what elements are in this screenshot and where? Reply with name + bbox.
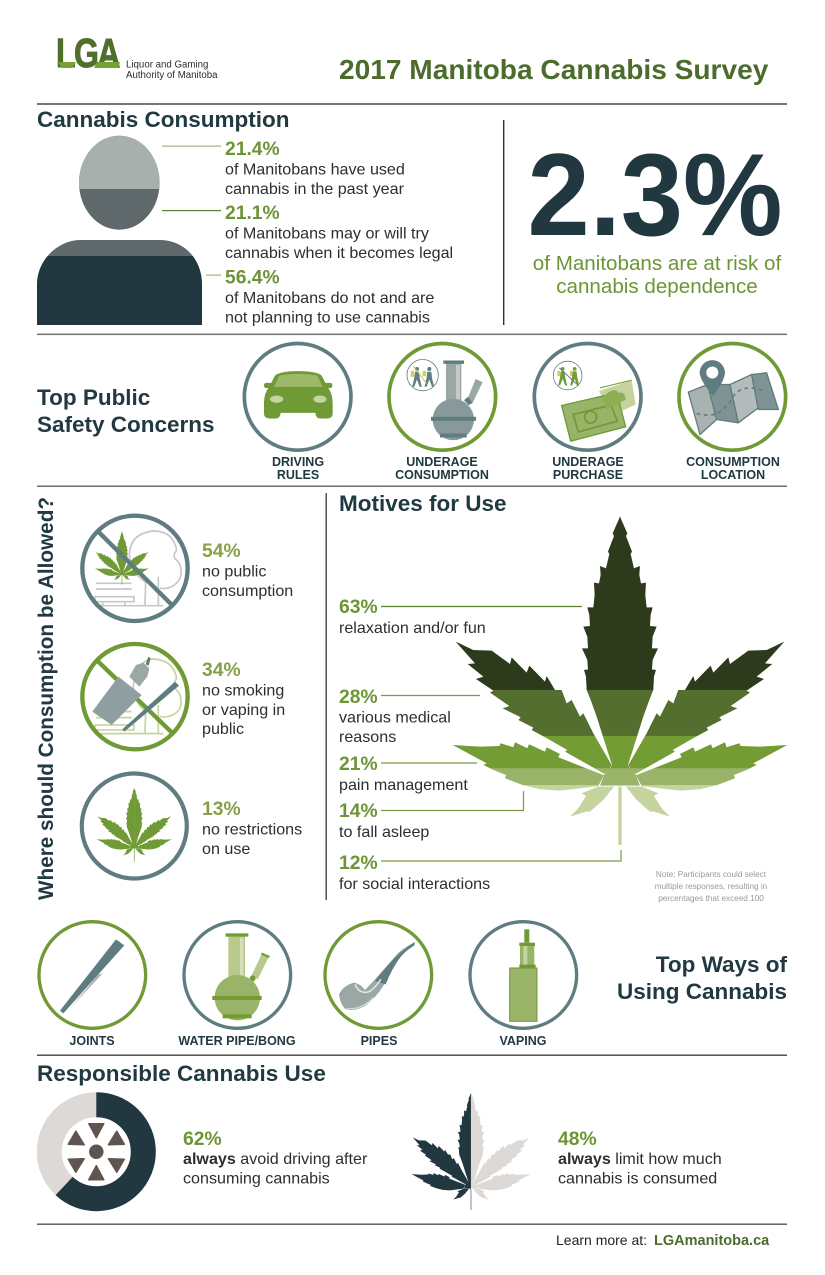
icon: underage purchase money <box>534 343 641 450</box>
split leaf icon: 48% <box>412 1093 531 1210</box>
stat: 34% <box>202 660 285 738</box>
labels: ways of using <box>69 1034 546 1048</box>
stat: 21.1%: of Manitobans may or will try <box>225 224 430 242</box>
labels: ways of using: VAPING <box>500 1034 546 1048</box>
donut tire chart: 62% <box>49 1105 143 1199</box>
stat: 56.4%: not planning to use cannabis <box>225 308 430 326</box>
icon: no public consumption <box>82 516 188 621</box>
footer link: Learn more at: <box>556 1232 647 1248</box>
stat: 62%: consuming cannabis <box>183 1170 330 1188</box>
icon: vape <box>470 922 577 1028</box>
stat: 21.1% <box>225 203 453 262</box>
labels: ways of using: WATER PIPE/BONG <box>178 1034 296 1048</box>
ways of using icons row <box>39 922 577 1028</box>
stat: 48%: always limit how much <box>558 1150 722 1168</box>
safety icons row <box>244 343 786 450</box>
stat: 54%: 54% <box>202 541 241 562</box>
icon: no restrictions leaf <box>82 774 187 878</box>
motive: 12%: 12% <box>339 853 378 874</box>
stat: 48%: cannabis is consumed <box>558 1170 717 1188</box>
large leaf band chart <box>452 516 788 845</box>
logo <box>56 30 218 81</box>
motive: 12% <box>339 853 490 893</box>
motive: 28%: reasons <box>339 728 396 746</box>
logo: LGA <box>56 30 120 76</box>
labels: safety concerns: RULES <box>277 468 319 482</box>
note: Note: Participants could select <box>656 870 767 879</box>
labels: safety concerns: LOCATION <box>701 468 765 482</box>
stat: 56.4%: of Manitobans do not and are <box>225 289 434 307</box>
stat: 34%: no smoking <box>202 682 284 700</box>
stat: 13%: no restrictions <box>202 820 302 838</box>
stat: 54% <box>202 541 293 600</box>
heading: top ways of using cannabis <box>617 952 788 1004</box>
icon: car <box>244 343 351 450</box>
motive: 63% <box>339 597 486 637</box>
labels: safety concerns: DRIVING <box>272 455 324 469</box>
motive: 14%: 14% <box>339 801 378 822</box>
heading: top ways of using cannabis: Top Ways of <box>656 952 788 977</box>
title: 2017 Manitoba Cannabis Survey <box>339 54 769 85</box>
stat: 21.4%: of Manitobans have used <box>225 160 405 178</box>
labels: ways of using: PIPES <box>361 1034 397 1048</box>
stat: 56.4%: 56.4% <box>225 268 280 288</box>
motive: 14% <box>339 801 429 841</box>
stat: 54%: no public <box>202 562 266 580</box>
stat: 21.1%: cannabis when it becomes legal <box>225 244 453 262</box>
footer link: LGAmanitoba.ca <box>654 1233 770 1249</box>
stat: 62% <box>183 1129 368 1188</box>
stat: 62%: 62% <box>183 1129 222 1150</box>
stat: 34%: public <box>202 720 244 738</box>
note <box>655 870 768 903</box>
note: percentages that exceed 100 <box>658 894 764 903</box>
labels: safety concerns: UNDERAGE <box>552 455 624 469</box>
logo: Liquor and Gaming <box>126 60 208 70</box>
person chart <box>37 136 221 325</box>
icon: map location pin <box>679 343 786 450</box>
motive: 14%: to fall asleep <box>339 823 429 841</box>
stat: 21.4%: cannabis in the past year <box>225 180 405 198</box>
motive: 21% <box>339 754 468 794</box>
heading: top ways of using cannabis: Using Cannabis <box>617 979 787 1004</box>
stat: 62%: always avoid driving after <box>183 1150 368 1168</box>
heading: top public safety concerns: Top Public <box>37 385 150 410</box>
motive: 63%: relaxation and/or fun <box>339 619 486 637</box>
stat: 48%: 48% <box>558 1129 597 1150</box>
motive: 28%: various medical <box>339 708 451 726</box>
icon: joint <box>39 922 146 1028</box>
icon: no smoking or vaping <box>82 644 188 749</box>
vertical heading: where should consumption be allowed: Where should Consumption be Allowed? <box>34 497 58 900</box>
logo: Authority of Manitoba <box>126 70 218 81</box>
stat: 34%: or vaping in <box>202 701 285 719</box>
stat: 21.1%: 21.1% <box>225 203 280 224</box>
labels: safety concerns: CONSUMPTION <box>686 455 780 469</box>
stat: 13% <box>202 799 302 858</box>
stat: 21.4%: 21.4% <box>225 139 280 160</box>
stat: 13%: 13% <box>202 799 241 820</box>
heading: motives for use: Motives for Use <box>339 491 507 516</box>
stat: 34%: 34% <box>202 660 241 681</box>
icon: water pipe <box>184 922 291 1028</box>
stat: 48% <box>558 1129 722 1188</box>
labels: ways of using: JOINTS <box>69 1034 115 1048</box>
motive: 12%: for social interactions <box>339 875 490 893</box>
note: multiple responses, resulting in <box>655 882 768 891</box>
labels: safety concerns <box>272 455 780 482</box>
leader lines <box>381 606 621 861</box>
heading: cannabis consumption: Cannabis Consumption <box>37 107 290 132</box>
motive: 63%: 63% <box>339 597 378 618</box>
heading: top public safety concerns <box>37 385 215 437</box>
stat: 56.4% <box>225 268 434 326</box>
stat: 21.4% <box>225 139 405 198</box>
heading: responsible cannabis use: Responsible Cannabis Use <box>37 1061 326 1086</box>
heading: top public safety concerns: Safety Concerns <box>37 412 215 437</box>
stat: 13%: on use <box>202 840 250 858</box>
motive: 28%: 28% <box>339 687 378 708</box>
labels: safety concerns: PURCHASE <box>553 468 623 482</box>
big stat: 2.3%: 2.3% <box>528 129 782 260</box>
footer link <box>556 1232 770 1249</box>
motive: 21%: 21% <box>339 754 378 775</box>
big stat: 2.3%: cannabis dependence <box>556 275 758 298</box>
labels: safety concerns: UNDERAGE <box>406 455 478 469</box>
motive: 21%: pain management <box>339 776 468 794</box>
big stat: 2.3%: of Manitobans are at risk of <box>533 252 781 275</box>
labels: safety concerns: CONSUMPTION <box>395 468 489 482</box>
stat: 54%: consumption <box>202 582 293 600</box>
icon: underage consumption bong <box>389 343 496 450</box>
motive: 28% <box>339 687 451 746</box>
icon: pipe <box>325 922 432 1028</box>
